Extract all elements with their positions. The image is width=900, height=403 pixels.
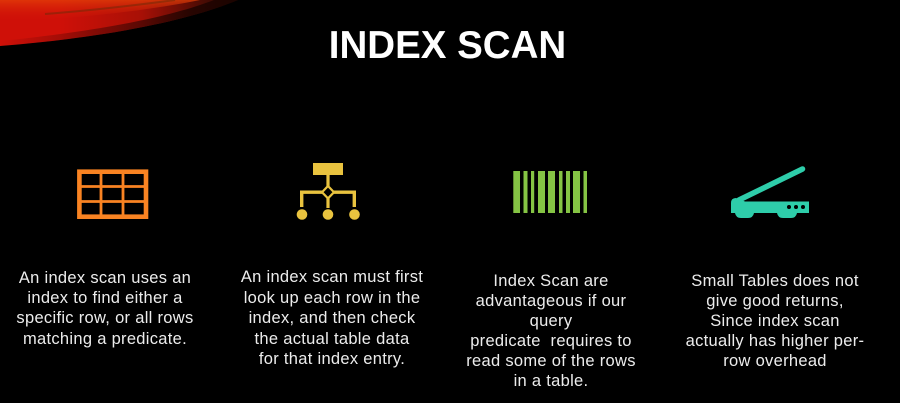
text: column 3: advantageous if our	[476, 292, 626, 310]
text: column 3: in a table.	[514, 372, 588, 390]
text: column 3: query	[530, 312, 572, 330]
text: column 4	[686, 272, 864, 370]
red base shape	[0, 0, 238, 46]
text: column 3	[466, 272, 636, 390]
text: column 1: index to find either a	[27, 289, 183, 307]
text: column 2: look up each row in the	[244, 288, 420, 306]
text: column 2: index, and then check	[249, 309, 415, 327]
text: column 4: Since index scan	[710, 312, 840, 330]
icon: hierarchy flowchart	[296, 163, 360, 220]
icon: barcode	[513, 171, 587, 213]
text: column 4: actually has higher per-	[686, 332, 864, 350]
text: column 3: Index Scan are	[493, 272, 609, 290]
text: column 1	[16, 269, 194, 348]
text: column 4: Small Tables does not	[691, 272, 859, 290]
text: column 2: the actual table data	[255, 330, 409, 348]
text: column 1: matching a predicate.	[23, 330, 187, 348]
title: INDEX SCAN	[329, 24, 566, 67]
decorative red swoosh	[0, 0, 238, 46]
text: column 4: row overhead	[723, 352, 827, 370]
text: column 2: An index scan must first	[241, 268, 423, 286]
text: column 1: An index scan uses an	[19, 269, 191, 287]
text: column 2: for that index entry.	[259, 350, 405, 368]
icon: flatbed scanner	[731, 166, 809, 218]
text: column 2	[240, 268, 423, 368]
icon: table grid	[77, 169, 148, 219]
text: column 3: predicate requires to	[470, 332, 632, 350]
text: column 3: read some of the rows	[466, 352, 636, 370]
text: column 4: give good returns,	[706, 292, 844, 310]
text: column 1: specific row, or all rows	[16, 309, 194, 327]
